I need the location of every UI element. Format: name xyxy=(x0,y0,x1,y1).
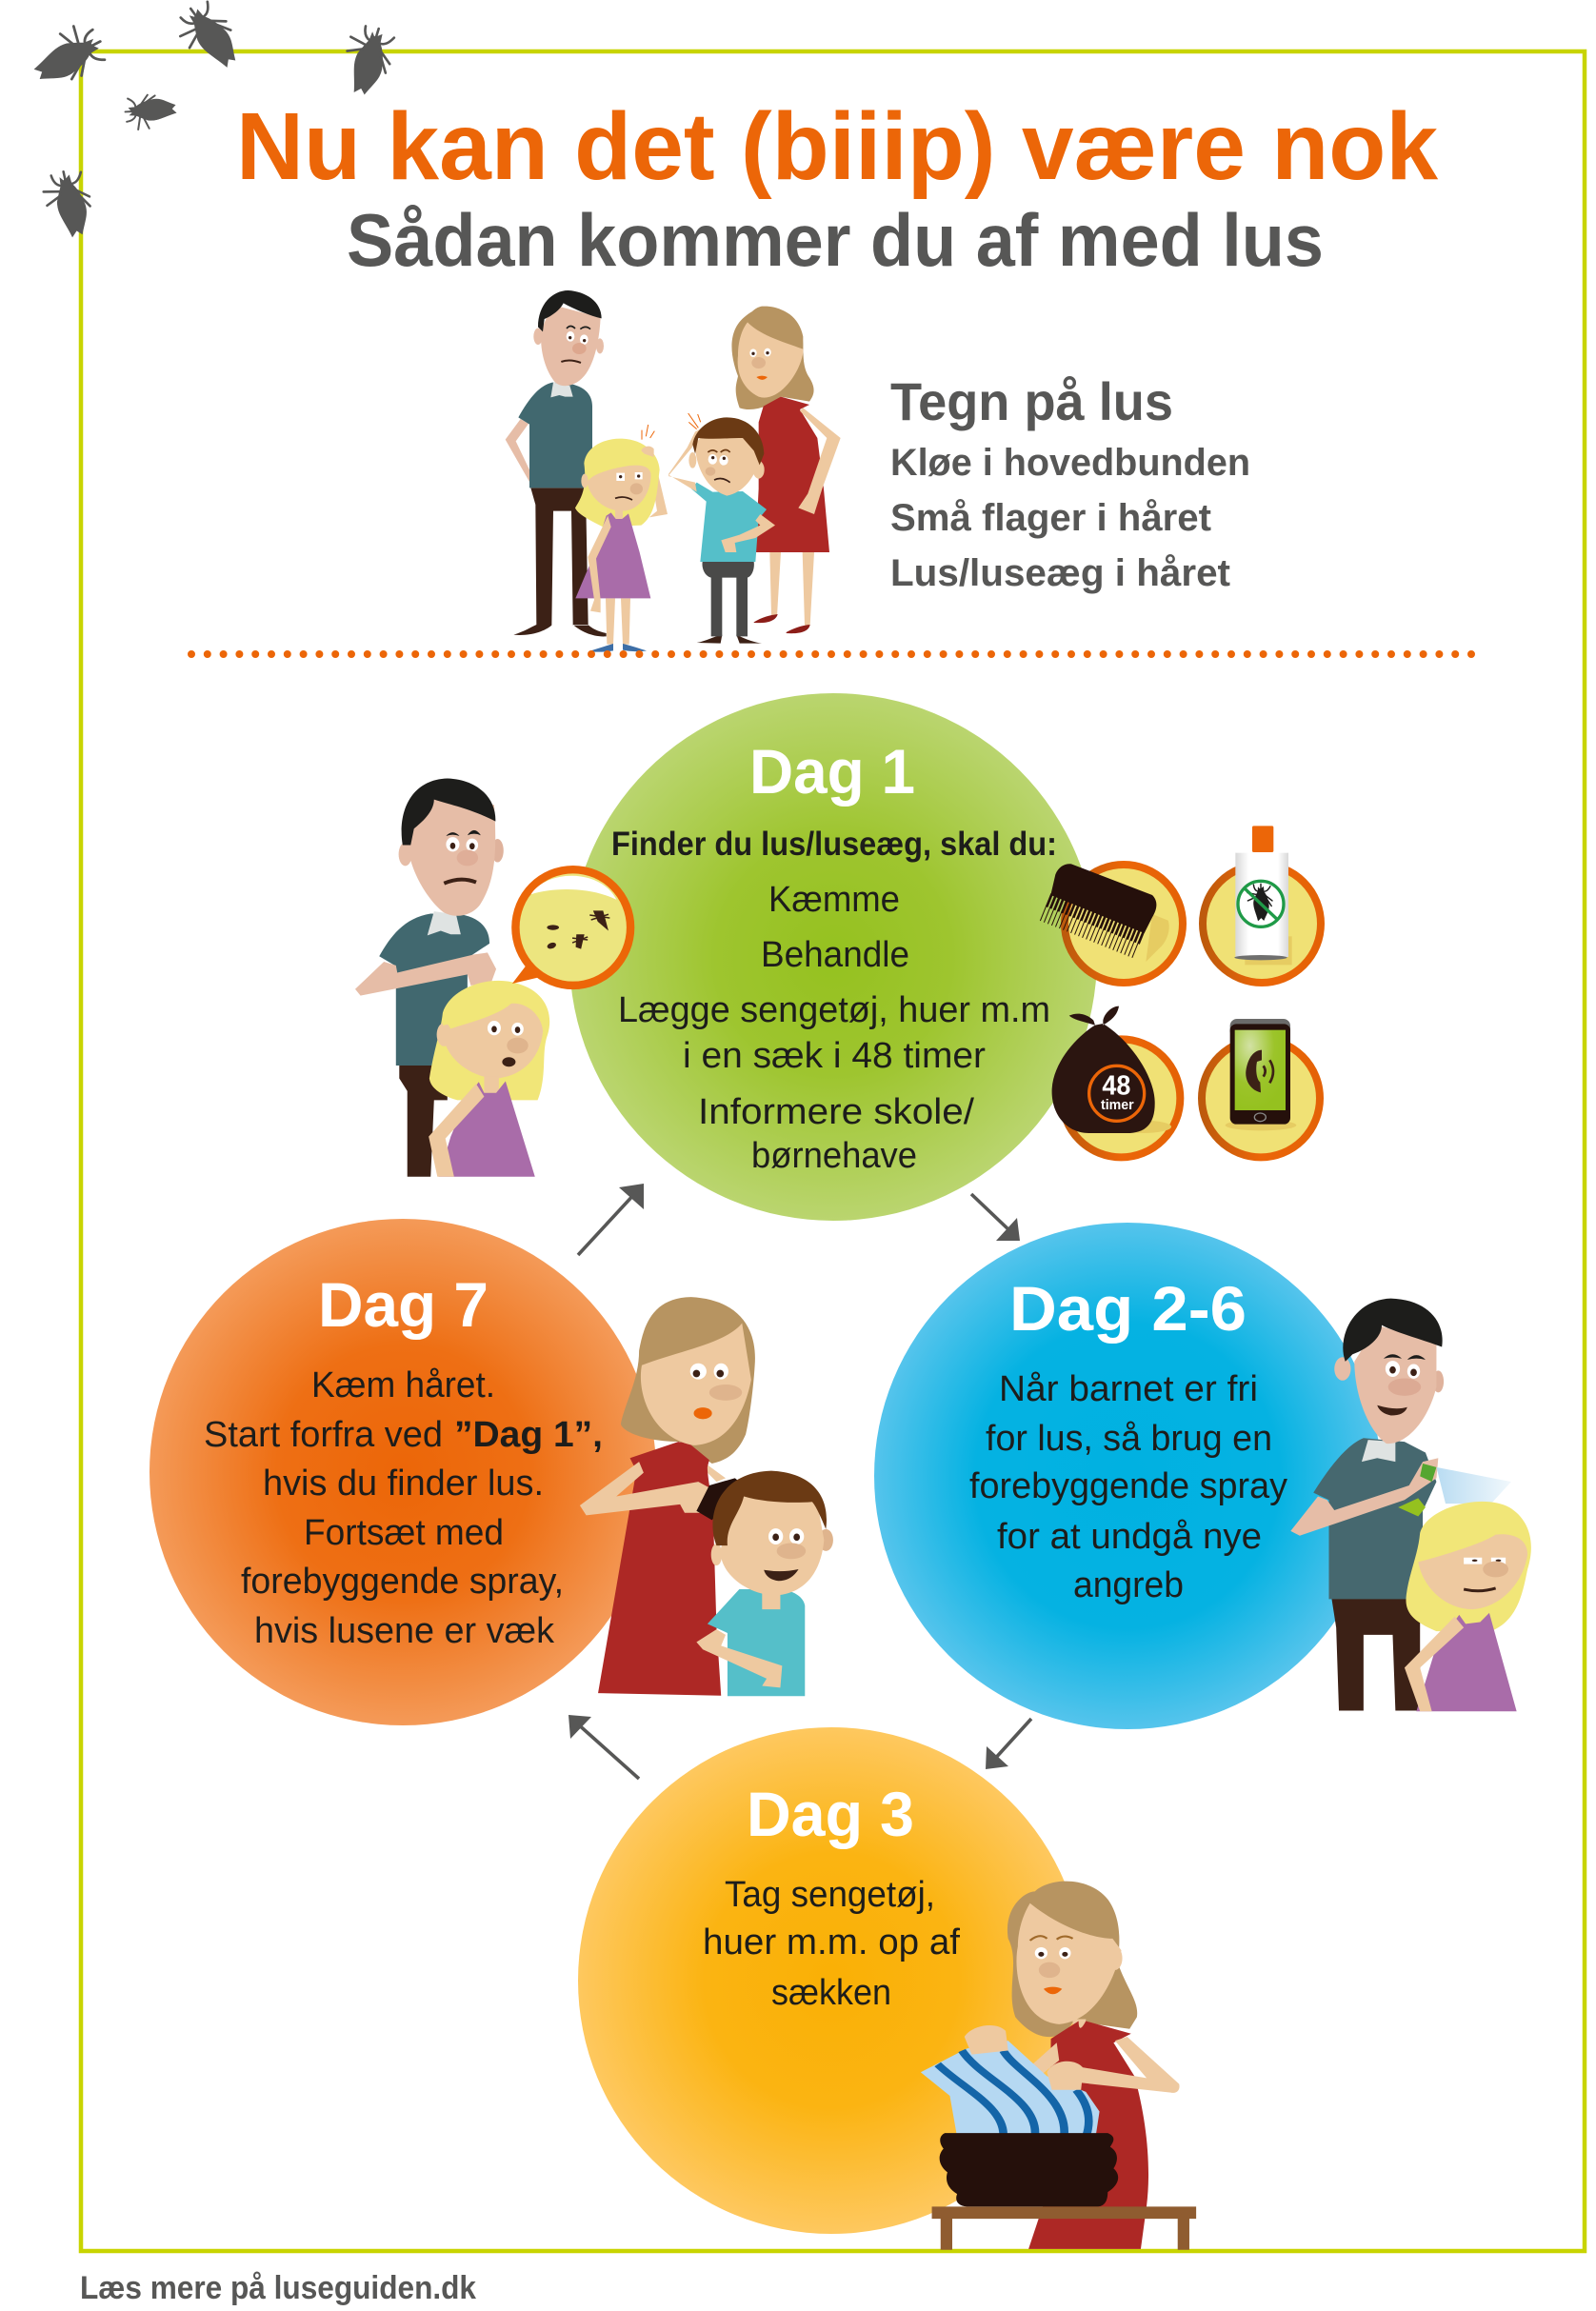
dag 2-6 heading: Dag 2-6 xyxy=(1009,1273,1247,1344)
table legs xyxy=(941,2218,1189,2250)
dag 2-6 text: for lus, så brug en xyxy=(986,1419,1272,1459)
icons: four treatment steps xyxy=(1043,826,1321,1157)
spray mist xyxy=(1436,1467,1511,1504)
dag 2-6 text: forebyggende spray xyxy=(969,1466,1287,1506)
dag 7 text: Start forfra ved xyxy=(204,1415,443,1455)
father xyxy=(506,290,607,636)
dag 3 heading: Dag 3 xyxy=(747,1779,914,1849)
title: Nu kan det (biiip) være nok xyxy=(236,93,1438,200)
footer: Læs mere på luseguiden.dk xyxy=(80,2270,476,2306)
dag 3 text: huer m.m. op af xyxy=(703,1923,960,1962)
dag 3 text: sækken xyxy=(771,1973,891,2013)
father checking girl with lens bubble xyxy=(355,778,634,1177)
dag 2-6 text: for at undgå nye xyxy=(997,1517,1262,1557)
lice decoration xyxy=(26,0,399,241)
dag 1 steps: børnehave xyxy=(751,1136,917,1176)
sign: nits: Lus/luseæg i håret xyxy=(890,552,1230,594)
dotted divider xyxy=(191,650,1474,658)
orange circle xyxy=(150,1219,656,1725)
arrow: dag 3 to dag 7 xyxy=(569,1715,639,1779)
dag 7 text: forebyggende spray, xyxy=(241,1562,564,1602)
dag 1 steps: i en sæk i 48 timer xyxy=(683,1036,986,1076)
mother xyxy=(731,307,841,633)
arrow: dag 2-6 to dag 3 xyxy=(986,1719,1031,1769)
magnifier bubble with lice xyxy=(511,866,634,989)
signs of lice text block xyxy=(890,371,1250,594)
dag 1 steps xyxy=(611,826,1057,1176)
sign: itching: Kløe i hovedbunden xyxy=(890,442,1250,484)
dag 7 heading: Dag 7 xyxy=(318,1269,489,1340)
family illustration xyxy=(506,290,841,652)
father xyxy=(355,778,504,1177)
panel: dag 3 xyxy=(578,1727,1085,2234)
sack xyxy=(940,2133,1118,2206)
dag 1 steps: Informere skole/ xyxy=(698,1092,974,1132)
green circle xyxy=(569,693,1097,1221)
signs heading: Tegn på lus xyxy=(890,371,1173,431)
icon: spray bottle xyxy=(1203,826,1321,983)
girl xyxy=(575,425,668,652)
girl xyxy=(429,981,549,1177)
dag 1 steps: Behandle xyxy=(761,935,909,975)
dag 2-6 text: Når barnet er fri xyxy=(999,1369,1258,1409)
arrow: dag 1 to dag 2-6 xyxy=(971,1194,1020,1241)
icon: comb xyxy=(1043,864,1183,983)
dag 1 steps: Lægge sengetøj, huer m.m xyxy=(618,990,1050,1030)
arrow: dag 7 to dag 1 xyxy=(578,1184,644,1255)
boy xyxy=(696,1471,833,1696)
dag 7 text: hvis du finder lus. xyxy=(263,1464,544,1504)
dag 7 text xyxy=(204,1365,603,1651)
dag 2-6 text: angreb xyxy=(1073,1565,1184,1605)
father spraying xyxy=(1290,1299,1444,1710)
mother with bedding and sack xyxy=(921,1882,1196,2250)
dag 7 text: Fortsæt med xyxy=(304,1513,504,1553)
mother xyxy=(580,1297,755,1696)
sign: flakes: Små flager i håret xyxy=(890,497,1211,539)
girl being sprayed xyxy=(1405,1502,1531,1711)
table top xyxy=(932,2206,1196,2219)
panel: dag 1 xyxy=(569,693,1097,1221)
icon: sack 48 timer xyxy=(1052,1006,1180,1157)
dag 3 text: Tag sengetøj, xyxy=(725,1875,935,1915)
dag 3 text xyxy=(703,1875,960,2013)
dag 1 heading: Dag 1 xyxy=(749,736,915,807)
panel: dag 7 xyxy=(150,1219,656,1725)
icon: sack 48 timer: 48 xyxy=(1102,1070,1130,1101)
blue circle xyxy=(874,1223,1381,1729)
boy xyxy=(668,413,775,644)
dag 1 steps: Kæmme xyxy=(768,880,900,920)
mother combing boy xyxy=(580,1297,1531,1711)
mother xyxy=(1007,1882,1180,2249)
dag 7 text: ”Dag 1”, xyxy=(454,1415,603,1455)
dag 1 steps: Finder du lus/luseæg, skal du: xyxy=(611,826,1057,863)
striped bedding xyxy=(921,2025,1100,2137)
dag 2-6 text xyxy=(969,1369,1287,1605)
dag 7 text: hvis lusene er væk xyxy=(254,1611,555,1651)
icon: phone xyxy=(1202,1019,1320,1157)
panel: dag 2-6 xyxy=(874,1223,1381,1729)
dag 7 text: Kæm håret. xyxy=(311,1365,495,1405)
comb in mother's hand xyxy=(696,1478,739,1520)
icon: sack 48 timer: timer xyxy=(1101,1098,1134,1113)
subtitle: Sådan kommer du af med lus xyxy=(347,198,1324,282)
yellow circle xyxy=(578,1727,1085,2234)
